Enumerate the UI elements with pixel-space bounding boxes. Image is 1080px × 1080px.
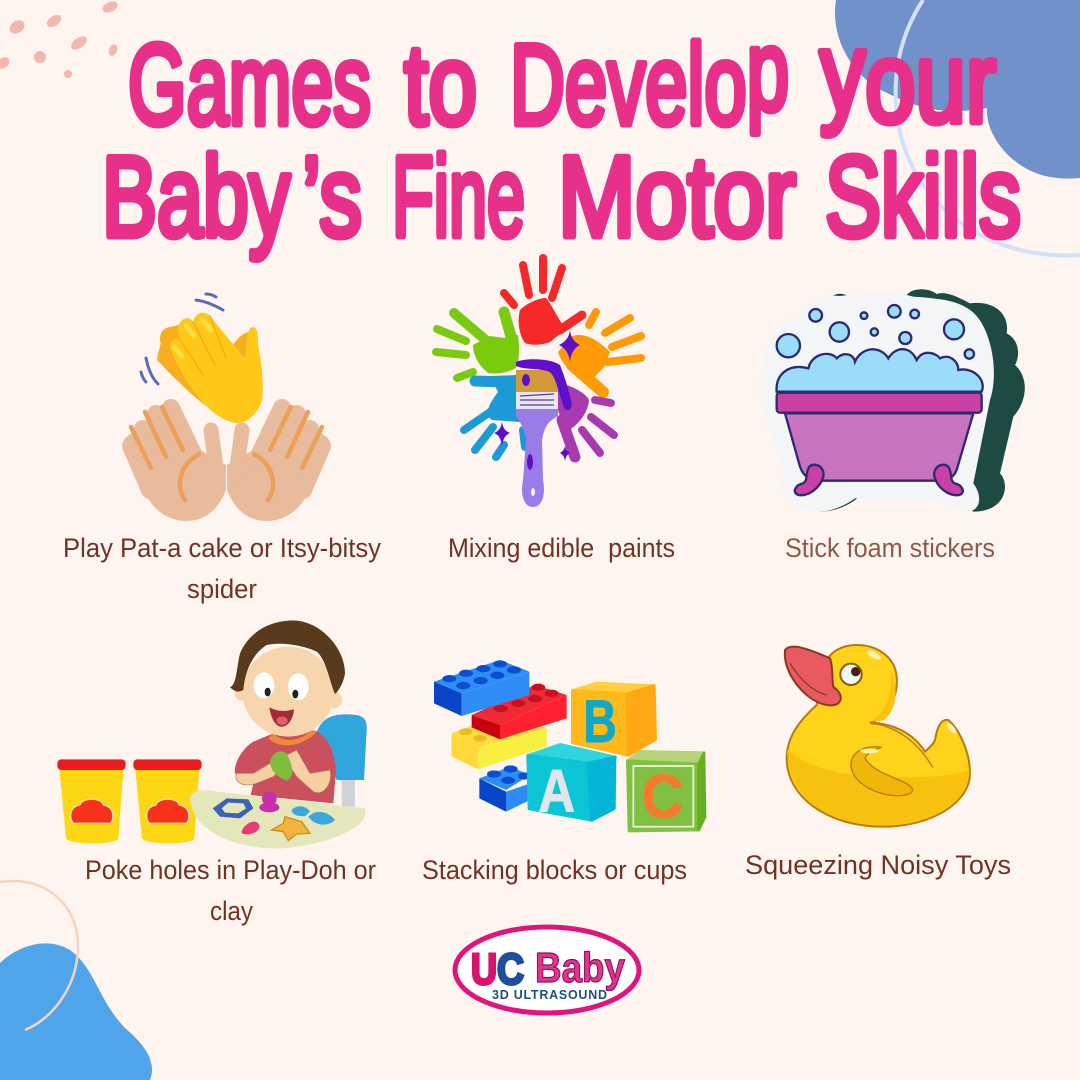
icon: toy blocks bbox=[434, 660, 705, 831]
bubbles bbox=[777, 305, 974, 359]
icon: rubber duck bbox=[785, 645, 970, 827]
orange hand bbox=[558, 312, 641, 392]
icon: clapping hands bbox=[122, 294, 331, 521]
caption: play-doh bbox=[85, 855, 376, 926]
caption: play-doh: Poke holes in Play-Doh or bbox=[85, 855, 376, 885]
title: ’s bbox=[302, 134, 362, 261]
yellow brick bbox=[452, 720, 547, 769]
sticker backing bbox=[759, 293, 994, 512]
title: y bbox=[820, 10, 865, 137]
caption: pat-a-cake: spider bbox=[187, 574, 257, 604]
title: our bbox=[865, 20, 996, 147]
logo: C bbox=[497, 945, 524, 994]
play-doh cans bbox=[57, 759, 202, 843]
tub body bbox=[785, 413, 973, 481]
green hand bbox=[436, 312, 519, 378]
yellow clapping hand bbox=[157, 313, 263, 423]
title: Motor bbox=[558, 134, 796, 261]
icon: boy playing with dough and cans bbox=[57, 621, 367, 849]
title: p bbox=[747, 8, 789, 135]
title: to bbox=[404, 22, 477, 149]
brush bbox=[516, 359, 572, 507]
right open hand bbox=[227, 404, 331, 521]
red brick bbox=[472, 684, 567, 739]
title: Develo bbox=[510, 22, 865, 149]
icon: bathtub sticker bbox=[759, 289, 1025, 512]
boy bbox=[230, 621, 345, 803]
sparkles bbox=[494, 330, 580, 461]
motion marks bbox=[141, 294, 223, 384]
title: Fine bbox=[392, 134, 525, 261]
feet bbox=[795, 465, 824, 495]
purple hand bbox=[556, 382, 614, 457]
caption: stacking blocks: Stacking blocks or cups bbox=[422, 855, 687, 885]
block C: C bbox=[642, 762, 683, 831]
small blue brick bbox=[479, 765, 530, 812]
decoration: bottom left blue blob bbox=[0, 881, 152, 1080]
decoration: top left dots bbox=[0, 0, 119, 78]
icon: painted handprints and brush bbox=[436, 258, 641, 507]
table with shapes bbox=[190, 790, 366, 849]
sticker shadow bbox=[818, 289, 1025, 512]
red hand bbox=[504, 258, 582, 345]
caption: foam stickers: Stick foam stickers bbox=[785, 533, 995, 563]
block B: B bbox=[583, 688, 617, 755]
logo: U bbox=[471, 945, 497, 994]
block C bbox=[627, 751, 705, 831]
tub rim bbox=[777, 393, 982, 413]
caption: play-doh: clay bbox=[210, 896, 253, 926]
logo bbox=[455, 927, 639, 1013]
logo: Baby bbox=[535, 944, 626, 991]
logo: 3D ULTRASOUND bbox=[492, 988, 607, 1002]
title: Baby bbox=[102, 134, 290, 261]
block A bbox=[528, 745, 615, 825]
left open hand bbox=[122, 404, 226, 521]
block B bbox=[573, 683, 655, 755]
title bbox=[102, 8, 1021, 261]
caption: pat-a-cake: Play Pat-a cake or Itsy-bitsy bbox=[63, 533, 381, 563]
caption: squeezing toys: Squeezing Noisy Toys bbox=[745, 850, 1011, 880]
caption: edible paints: Mixing edible paints bbox=[448, 533, 675, 563]
blue brick bbox=[434, 660, 529, 716]
chair bbox=[317, 714, 367, 807]
caption: pat-a-cake bbox=[63, 533, 381, 604]
decoration: top right blue blob bbox=[835, 0, 1080, 255]
title: Games bbox=[128, 22, 371, 149]
blue hand bbox=[464, 375, 525, 457]
foam bbox=[777, 349, 983, 392]
block A: A bbox=[538, 758, 575, 825]
